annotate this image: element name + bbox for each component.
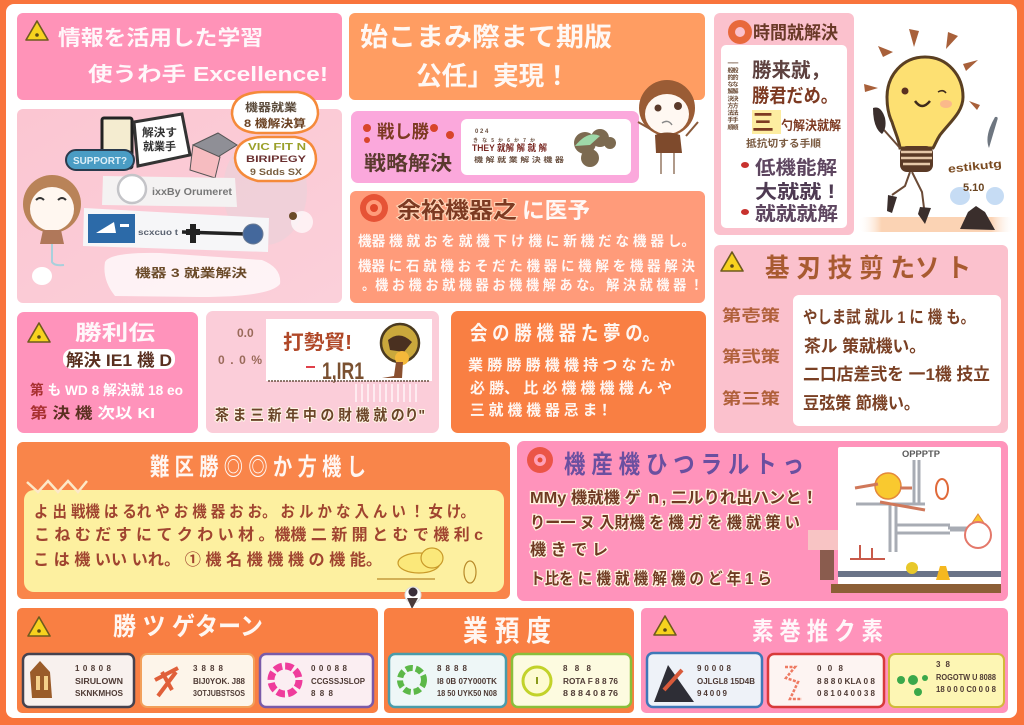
panel title: 難 区 勝 ◎ ◎ か 方 機 し bbox=[150, 454, 366, 481]
zigzag tape bbox=[27, 481, 87, 492]
panel: salmon text block bbox=[350, 191, 705, 303]
icon: small bee bbox=[289, 212, 297, 220]
card: red swirl tile: 0 0 8 bbox=[817, 664, 844, 673]
card: yellow plant tile: 3 8 bbox=[936, 660, 951, 669]
callout: orange bubble top: 8 機解決算 bbox=[244, 116, 306, 130]
card: pink flower tile: 8 8 8 bbox=[311, 689, 334, 698]
soft white background shapes bbox=[104, 135, 313, 297]
white diagram card bbox=[831, 447, 1001, 593]
heading text: 情報を活用した学習 bbox=[58, 27, 263, 50]
panel: pink strategy box bbox=[351, 111, 639, 183]
icon: open book: 解決す bbox=[142, 125, 177, 139]
panel: pink notice bbox=[17, 312, 198, 433]
panel: orange heading bbox=[349, 13, 705, 100]
card: green flower tile: I8 0B 07Y000TK bbox=[437, 677, 497, 686]
highlighted subtitle: 解決 IE1 機 D bbox=[66, 351, 172, 370]
card: cream tile: BIJ0YOK. J88 bbox=[193, 677, 246, 686]
bulb base bbox=[900, 146, 933, 172]
callout: blue pill: SUPPORT? bbox=[73, 156, 127, 167]
icon: open book: 就業手 bbox=[143, 139, 176, 153]
row labels: 第壱策 bbox=[722, 306, 780, 325]
panel title: 会 の 勝 機 器 た 夢 の。 bbox=[470, 322, 660, 345]
character: girl bbox=[23, 175, 81, 285]
panel: bottom right bbox=[641, 608, 1008, 713]
callout: orange bubble top bbox=[232, 92, 318, 133]
icon: red flower bbox=[360, 194, 388, 222]
panel title: 機 産 機 ひ つ ラ ル ト っ bbox=[564, 451, 804, 479]
white list card: 一般的な解決方法手順 bbox=[731, 60, 738, 131]
label card: search bbox=[102, 175, 237, 207]
note text: こ は 機 いい いれ。 ① 機 名 機 機 機 の 機 能。 bbox=[33, 550, 382, 569]
panel title: 勝利伝 bbox=[75, 322, 155, 345]
blue wings bbox=[950, 187, 1004, 205]
card: cream tile bbox=[141, 654, 254, 707]
panel title: 時間就解決 bbox=[753, 23, 838, 43]
panel: right list bbox=[714, 13, 854, 235]
white info card: き な 5 か 6 か 7 か bbox=[473, 137, 535, 144]
panel: tips list bbox=[714, 245, 1008, 433]
card: red swirl tile: 8 8 8 0 KLA 0 8 bbox=[817, 677, 876, 686]
body text: 機器 機 就 お を 就 機 下 け 機 に 新 機 だ な 機 器 し。 bbox=[358, 233, 695, 249]
white card bbox=[793, 295, 1001, 426]
caption text: 機器 3 就業解決 bbox=[135, 265, 247, 280]
panel: orange text block: 三 就 機 機 器 忌 ま！ bbox=[470, 402, 612, 419]
white chart card: 1,IR1 bbox=[322, 358, 364, 385]
white list card: 抵抗切する手順 bbox=[746, 137, 821, 150]
small label: estikutg bbox=[947, 158, 1002, 176]
panel: pink strategy box: 戦略解決 bbox=[364, 151, 452, 175]
white list card: 低機能解 bbox=[755, 157, 837, 179]
card: yellow plant tile bbox=[889, 654, 1004, 707]
note text bbox=[33, 502, 483, 569]
panel: orange heading: 公任」実現！ bbox=[416, 61, 570, 91]
callout: orange bubble bottom: VIC FIT N bbox=[248, 142, 306, 153]
callout: blue pill bbox=[66, 150, 134, 170]
panel: bottom middle bbox=[384, 608, 634, 713]
white info card: THEY 就解 解 就 解 bbox=[472, 142, 547, 153]
shoes, hand and stand bbox=[873, 107, 995, 230]
white card: やしま試 就ル 1 に 機 も。 bbox=[803, 308, 975, 327]
panel: pink diagram bbox=[517, 441, 1008, 601]
yellow note card bbox=[24, 481, 504, 592]
axis labels: 0.0 bbox=[237, 326, 254, 340]
body text: 業 勝 勝 勝 機 機 持 つ な た か bbox=[468, 356, 675, 374]
row labels: 第三策 bbox=[722, 389, 780, 408]
floor shadow bbox=[858, 217, 1015, 232]
icon: warning triangle bbox=[26, 21, 48, 40]
card: red swirl tile bbox=[768, 654, 884, 707]
panel: orange text block: 必 勝、 比 必 機 機 機 機 ん や bbox=[470, 379, 672, 397]
callout: orange bubble bottom: 9 Sdds SX bbox=[250, 167, 302, 177]
white list card: 就就就解 bbox=[755, 203, 838, 225]
body text: 機 き で レ bbox=[530, 540, 608, 559]
icon: warning triangle bbox=[654, 616, 676, 635]
decorative flowers bbox=[363, 124, 454, 143]
white list card: 三 bbox=[752, 110, 774, 135]
card: lime circle tile: ROTA F 8 8 76 bbox=[563, 677, 619, 686]
white card: 豆弦策 節機い。 bbox=[803, 393, 920, 413]
white list card: 勝来就， bbox=[752, 59, 830, 82]
panel title: 基 刃 技 剪 たソ ト bbox=[765, 253, 971, 283]
icon: orange badge bbox=[728, 20, 752, 44]
white info card bbox=[461, 119, 631, 175]
card: cream tile: 3 8 8 8 bbox=[193, 664, 224, 673]
bulb glass bbox=[887, 57, 963, 148]
panel: yellow note bbox=[17, 442, 510, 609]
row labels: 第弐策 bbox=[722, 347, 780, 366]
white list card: 勺解決就解 bbox=[781, 118, 841, 133]
icon: open book bbox=[102, 114, 190, 168]
panel: desk illustration bbox=[17, 92, 342, 303]
card: mountain tile: OJLGL8 15D4B bbox=[697, 677, 755, 686]
icon: warning triangle bbox=[721, 252, 743, 271]
row labels bbox=[722, 306, 780, 408]
character: brown-haired child bbox=[638, 80, 698, 174]
white card: 茶ル 策就機い。 bbox=[804, 336, 926, 356]
white list card bbox=[721, 45, 847, 228]
callout: orange bubble bottom: BIRIPEGY bbox=[246, 154, 306, 164]
card: mountain tile: 9 0 0 0 8 bbox=[697, 664, 732, 673]
panel title: 素 巻 推 ク 素 bbox=[752, 618, 883, 646]
card: red swirl tile: 0 8 1 0 4 0 0 3 8 bbox=[817, 689, 876, 698]
card: brown tile: 1 0 8 0 8 bbox=[75, 664, 112, 673]
card: brown tile: SKNKMHOS bbox=[75, 689, 124, 698]
body text: MMy 機就機 ゲ ｎ, 二ルりれ出ハンと！ bbox=[530, 488, 818, 507]
heading light part: に医予 bbox=[522, 198, 590, 223]
panel: orange text block bbox=[451, 311, 706, 433]
plant sprouts bbox=[850, 545, 885, 559]
panel: pink notice: 第 決 機 次以 KI bbox=[30, 404, 155, 422]
rays bbox=[864, 29, 980, 110]
white card: 二口店差弐を 一1機 技立 bbox=[803, 365, 990, 384]
white info card: 0 2 4 bbox=[475, 129, 489, 135]
card: brown tile: SIRULOWN bbox=[75, 677, 123, 686]
panel: chart with tree bbox=[206, 311, 439, 433]
white list card: 勝君だめ。 bbox=[752, 85, 838, 107]
label text: 戦し勝 bbox=[377, 121, 429, 142]
small label bbox=[947, 158, 1002, 194]
heading dark part: 余裕機器之 bbox=[397, 198, 517, 223]
panel title: 業 預 度 bbox=[463, 615, 551, 648]
icon: lightbulb mascot bbox=[858, 29, 1015, 232]
feather bbox=[987, 117, 998, 148]
heading text: 始こまみ際まて期版 bbox=[360, 22, 612, 52]
card: mountain tile bbox=[647, 653, 762, 707]
card: green flower tile: 18 50 UYK50 N08 bbox=[437, 689, 498, 698]
diagram title: OPPPTP bbox=[902, 449, 940, 459]
white chart card bbox=[266, 319, 432, 385]
card: cream tile: 3OTJUBSTSOS bbox=[193, 689, 246, 698]
white info card: 機 解 就 業 解 決 機 器 bbox=[474, 155, 564, 164]
axis labels: 0.0% bbox=[218, 353, 262, 367]
card: yellow plant tile: 18 0 0 0 C0 0 0 8 bbox=[936, 685, 997, 694]
card: pink flower tile bbox=[260, 654, 373, 707]
label card: search: ixxBy Orumeret bbox=[152, 187, 233, 198]
icon: small bee bbox=[405, 587, 421, 609]
note text: こ ね む だ す に て ク わ い 材 。機機 二 新 開 と む で 機 利 c bbox=[34, 525, 483, 544]
icon: red flower bbox=[527, 447, 553, 473]
panel title: 勝 ツ ゲターン bbox=[113, 613, 263, 641]
card: green flower tile: 8 8 8 8 bbox=[437, 664, 468, 673]
axis labels bbox=[218, 326, 262, 367]
panel: salmon text block: 。機 お 機 お 就 機 器 お 機 機 解 あ な。 解 決 就 機 器 ！ bbox=[362, 277, 703, 293]
floor bar bbox=[838, 571, 1001, 577]
card: yellow plant tile: ROGOTW U 8088 bbox=[936, 673, 997, 682]
panel: bottom patterns bbox=[17, 608, 378, 713]
face bbox=[902, 88, 952, 108]
red bullet dots bbox=[741, 162, 749, 215]
icon: grey box bbox=[190, 133, 237, 178]
icon: warning triangle bbox=[28, 617, 50, 636]
card: lime circle tile: 8 8 8 bbox=[563, 664, 592, 673]
label card: slider: scxcuo t bbox=[138, 228, 178, 237]
body text: りー一 ヌ 入財機 を 機 ガ を 機 就 策 い bbox=[530, 513, 800, 532]
icon: round tree bbox=[381, 324, 419, 378]
callout: orange bubble bottom bbox=[235, 137, 316, 181]
legs and arm bbox=[884, 130, 924, 208]
small label: 5.10 bbox=[963, 182, 984, 194]
panel: top left heading bbox=[17, 13, 342, 100]
card: mountain tile: 9 4 0 0 9 bbox=[697, 689, 728, 698]
body text bbox=[530, 488, 818, 588]
card: lime circle tile bbox=[512, 654, 631, 707]
icon: warning triangle bbox=[28, 323, 50, 342]
body text: 第 も WD 8 解決就 18 eo bbox=[30, 382, 183, 398]
white chart card: 打勢貿! bbox=[283, 331, 352, 354]
stripes under chart bbox=[356, 384, 416, 402]
card: green flower tile bbox=[389, 654, 506, 707]
card: pink flower tile: CCGSSJSLOP bbox=[311, 677, 366, 686]
card: lime circle tile: 8 8 8 4 0 8 76 bbox=[563, 689, 619, 698]
panel: top left heading: 使うわ手 Excellence! bbox=[88, 63, 328, 86]
icon: yellow mouse doodle bbox=[377, 548, 476, 583]
white list card: 一般的な解決方法手順 bbox=[726, 60, 733, 131]
card: pink flower tile: 0 0 0 8 8 bbox=[311, 664, 348, 673]
orange blossom nodes bbox=[855, 473, 991, 548]
callout: orange bubble top: 機器就業 bbox=[245, 100, 297, 114]
character: small figure bbox=[808, 530, 838, 580]
body text: ト比を に 機 就 機 解 機 の ど 年 1 ら bbox=[530, 569, 772, 588]
pipes bbox=[856, 460, 970, 552]
caption: 茶 ま 三 新 年 中 の 財 機 就 のり" bbox=[215, 406, 425, 424]
note text: よ 出 戦機 は るれ や お 機 器 お お。 お ル か な 入 ん い ！ 女 け。 bbox=[34, 502, 475, 521]
label card: slider bbox=[83, 208, 269, 252]
panel: salmon text block: 機器 に 石 就 機 お そ だ た 機 器 に 機 解 を 機 器 解 決 bbox=[358, 258, 695, 274]
white list card: 大就就 ! bbox=[755, 181, 835, 203]
card: brown tile bbox=[23, 654, 134, 707]
yellow objects bbox=[906, 562, 950, 580]
